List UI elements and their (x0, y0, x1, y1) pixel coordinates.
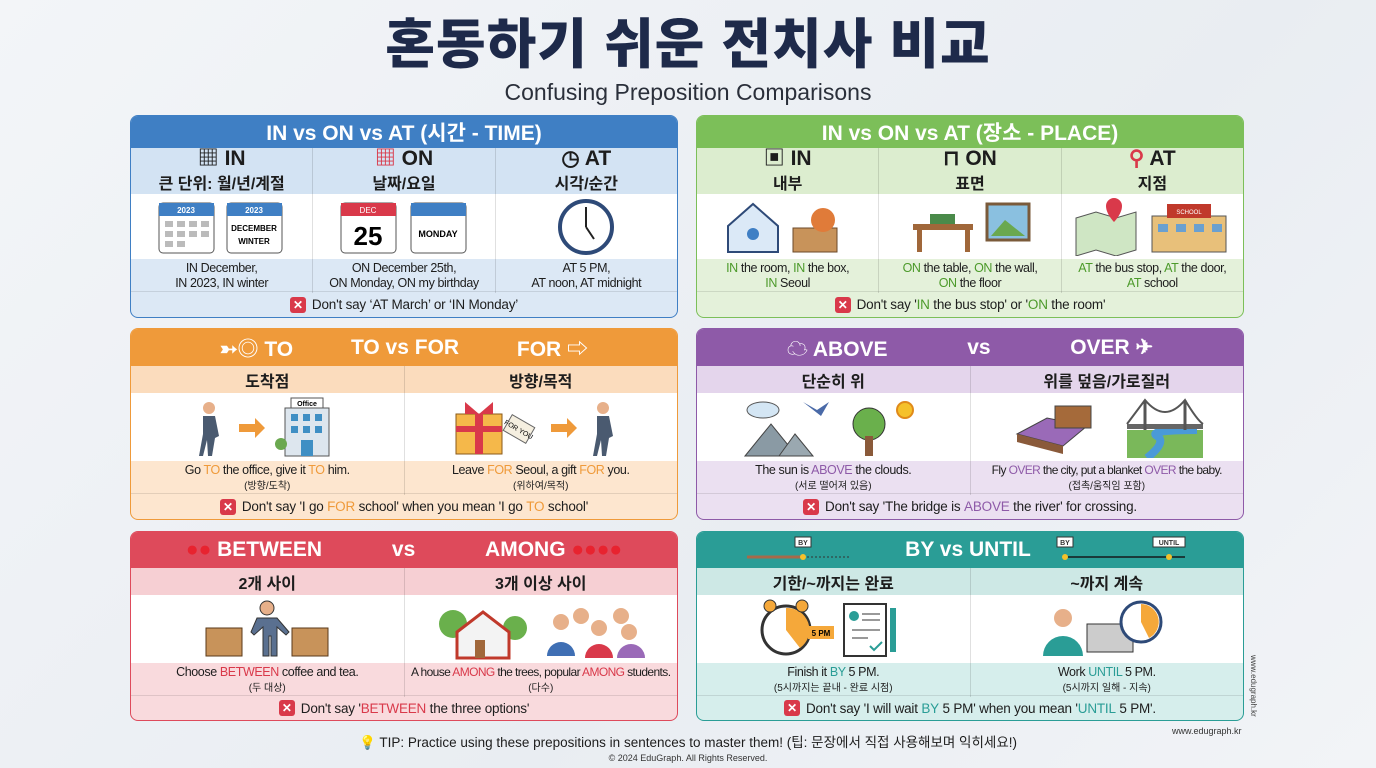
footer: by vs until: BY (921, 700, 939, 716)
heading: by vs until: UNTIL (1159, 540, 1180, 547)
footer: place: IN (917, 297, 930, 312)
footer: place: Don't say ' the bus stop' or ' the room' (857, 297, 1105, 312)
heading: above vs over: vs (967, 336, 991, 358)
examples: by vs until: (5시까지는 끝내 - 완료 시점) (774, 683, 893, 694)
icons: calendars and clock: 25 (354, 220, 382, 250)
examples: time (175, 259, 642, 293)
examples: to vs for: (위하여/목적) (513, 481, 568, 492)
heading: between vs among (131, 532, 677, 568)
panel: place: 내부 (773, 176, 802, 193)
title: 혼동하기 쉬운 전치사 비교 (385, 15, 991, 75)
icons: walker to office, gift to person: Office (297, 401, 317, 408)
panel: above vs over (696, 328, 1244, 520)
heading: between vs among: vs (392, 538, 415, 561)
heading: to vs for (131, 329, 677, 366)
heading: time: IN vs ON vs AT (시간 - TIME) (266, 122, 542, 145)
icons: calendars and clock: DEC (360, 206, 377, 214)
subtitle: Confusing Preposition Comparisons (505, 79, 871, 105)
examples: to vs for: Go TO the office, give it TO him. (185, 463, 350, 477)
footer: to vs for: FOR (327, 499, 355, 514)
examples: place (726, 259, 1226, 293)
icons: by, until (697, 595, 1243, 663)
footer: by vs until: Don't say 'I will wait 5 PM' when you mean ' 5 PM'. (806, 700, 1156, 716)
examples: above vs over: (접촉/움직임 포함) (1068, 481, 1145, 492)
examples: time: AT 5 PM, (562, 261, 610, 275)
footer: place (697, 291, 1243, 317)
heading: above vs over (697, 329, 1243, 366)
panel: time: 날짜/요일 (372, 176, 436, 193)
footer: to vs for: TO (526, 499, 544, 514)
examples: above vs over: (서로 떨어져 있음) (795, 481, 872, 492)
icons: between, among (131, 595, 677, 663)
footer: by vs until (697, 695, 1243, 720)
icons: calendars and clock: DECEMBER (231, 224, 277, 232)
examples: to vs for (185, 461, 630, 495)
heading: between vs among: AMONG ●●●● (485, 538, 622, 561)
panel: by vs until (696, 531, 1244, 721)
examples: time: IN December, (186, 261, 257, 275)
icons: place (697, 194, 1243, 259)
icons: calendars and clock: WINTER (238, 236, 270, 246)
examples: place: ON the floor (939, 276, 1001, 290)
examples: place: ON the table, ON the wall, (903, 261, 1037, 275)
footer: to vs for: Don't say 'I go school' when you mean 'I go school' (242, 499, 588, 514)
panel: between vs among: 2개 사이 (238, 576, 296, 592)
heading: by vs until: BY (1060, 540, 1070, 547)
heading: above vs over: ☁ ABOVE (787, 338, 888, 360)
heading: to vs for: TO vs FOR (351, 336, 459, 358)
copyright: © 2024 EduGraph. All Rights Reserved. (609, 753, 767, 763)
panel: by vs until: 기한/~까지는 완료 (773, 576, 894, 592)
footer: above vs over: Don't say 'The bridge is the river' for crossing. (825, 499, 1137, 514)
footer: place: ✕ (838, 298, 848, 312)
examples: time: ON Monday, ON my birthday (329, 276, 479, 290)
examples: place: IN Seoul (765, 276, 810, 290)
panel: time: 시각/순간 (555, 176, 618, 193)
examples: to vs for: (방향/도착) (244, 481, 290, 492)
panel: time: ▦ IN (198, 147, 246, 170)
panel: above vs over: 위를 덮음/가로질러 (1043, 374, 1170, 390)
heading: to vs for: ➳◎ TO (220, 338, 293, 360)
examples: by vs until: Finish it BY 5 PM. (787, 665, 879, 679)
footer: place: ON (1028, 297, 1048, 312)
panel: time (130, 115, 678, 318)
icons: calendars and clock (131, 194, 677, 259)
footer: time: ✕ (293, 298, 303, 312)
panel: to vs for: 방향/목적 (509, 374, 572, 390)
examples: above vs over: The sun is ABOVE the clouds. (755, 463, 911, 477)
footer: between vs among: BETWEEN (361, 700, 426, 716)
examples: time: AT noon, AT midnight (531, 276, 641, 290)
panel: place: ⚲ AT (1129, 147, 1176, 170)
footer: to vs for (131, 493, 677, 519)
panel: place (696, 115, 1244, 318)
footer: between vs among: Don't say ' the three options' (301, 700, 529, 716)
heading: place (697, 116, 1243, 148)
footer: to vs for: ✕ (223, 500, 233, 514)
footer: time (131, 291, 677, 317)
footer: time: Don't say ‘AT March’ or ‘IN Monday’ (312, 297, 518, 312)
examples: place: AT school (1127, 276, 1178, 290)
icons: above, over (697, 393, 1243, 461)
icons: walker to office, gift to person: FOR YOU (502, 419, 534, 441)
panel: by vs until: ~까지 계속 (1070, 576, 1143, 592)
panel: time: 큰 단위: 월/년/계절 (159, 176, 285, 193)
icons: calendars and clock: 2023 (177, 206, 195, 214)
side watermark: www.edugraph.kr (1249, 655, 1258, 717)
examples: between vs among: (두 대상) (249, 683, 286, 694)
examples: to vs for: Leave FOR Seoul, a gift FOR you. (452, 463, 630, 477)
examples: between vs among (176, 663, 670, 697)
heading: by vs until (697, 532, 1243, 568)
footer: by vs until: UNTIL (1078, 700, 1116, 716)
examples: by vs until: Work UNTIL 5 PM. (1058, 665, 1156, 679)
footer: above vs over: ✕ (806, 500, 816, 514)
examples: by vs until: (5시까지 일해 - 지속) (1063, 683, 1151, 694)
examples: time: ON December 25th, (352, 261, 456, 275)
heading: to vs for: FOR ⇨ (517, 338, 588, 360)
heading: time (131, 116, 677, 148)
panel: time: ◷ AT (561, 147, 611, 170)
footer: by vs until: ✕ (787, 701, 797, 715)
examples: time: IN 2023, IN winter (175, 276, 268, 290)
heading: place: IN vs ON vs AT (장소 - PLACE) (822, 122, 1118, 145)
footer: between vs among (131, 695, 677, 720)
examples: between vs among: Choose BETWEEN coffee and tea. (176, 665, 358, 679)
footer: above vs over: ABOVE (964, 499, 1010, 514)
panel: place: 표면 (955, 176, 985, 193)
examples: by vs until (774, 663, 1156, 697)
icons: by, until: 5 PM (812, 629, 831, 638)
heading: above vs over: OVER ✈ (1070, 336, 1153, 359)
panel: place: ▣ IN (764, 147, 812, 170)
footer: above vs over (697, 493, 1243, 519)
footer: between vs among: ✕ (282, 701, 292, 715)
icons: calendars and clock: 2023 (245, 206, 263, 214)
panel: between vs among: 3개 이상 사이 (495, 576, 586, 592)
panel: above vs over: 단순히 위 (802, 374, 865, 390)
examples: above vs over: Fly OVER the city, put a blanket OVER the baby. (992, 463, 1222, 477)
panel: to vs for: 도착점 (245, 374, 289, 390)
heading: by vs until: BY (798, 540, 808, 547)
examples: between vs among: A house AMONG the trees, popular AMONG students. (411, 665, 670, 679)
panel: place: ⊓ ON (943, 147, 997, 170)
examples: place: AT the bus stop, AT the door, (1078, 261, 1226, 275)
panel: place: 지점 (1138, 176, 1167, 193)
icons: place: SCHOOL (1177, 210, 1203, 216)
heading: by vs until: BY vs UNTIL (905, 538, 1031, 561)
icons: walker to office, gift to person (131, 393, 677, 461)
examples: between vs among: (다수) (528, 683, 553, 694)
website: www.edugraph.kr (1172, 726, 1242, 736)
examples: place: IN the room, IN the box, (726, 261, 849, 275)
panel: time: ▦ ON (375, 147, 433, 170)
heading: between vs among: ●● BETWEEN (186, 538, 322, 561)
panel: to vs for (130, 328, 678, 520)
icons: calendars and clock: MONDAY (418, 228, 458, 238)
tip: 💡 TIP: Practice using these prepositions in sentences to master them! (팁: 문장에서 직접 사용해보며 익히세요!) (359, 735, 1017, 750)
panel: between vs among (130, 531, 678, 721)
examples: above vs over (755, 461, 1222, 495)
